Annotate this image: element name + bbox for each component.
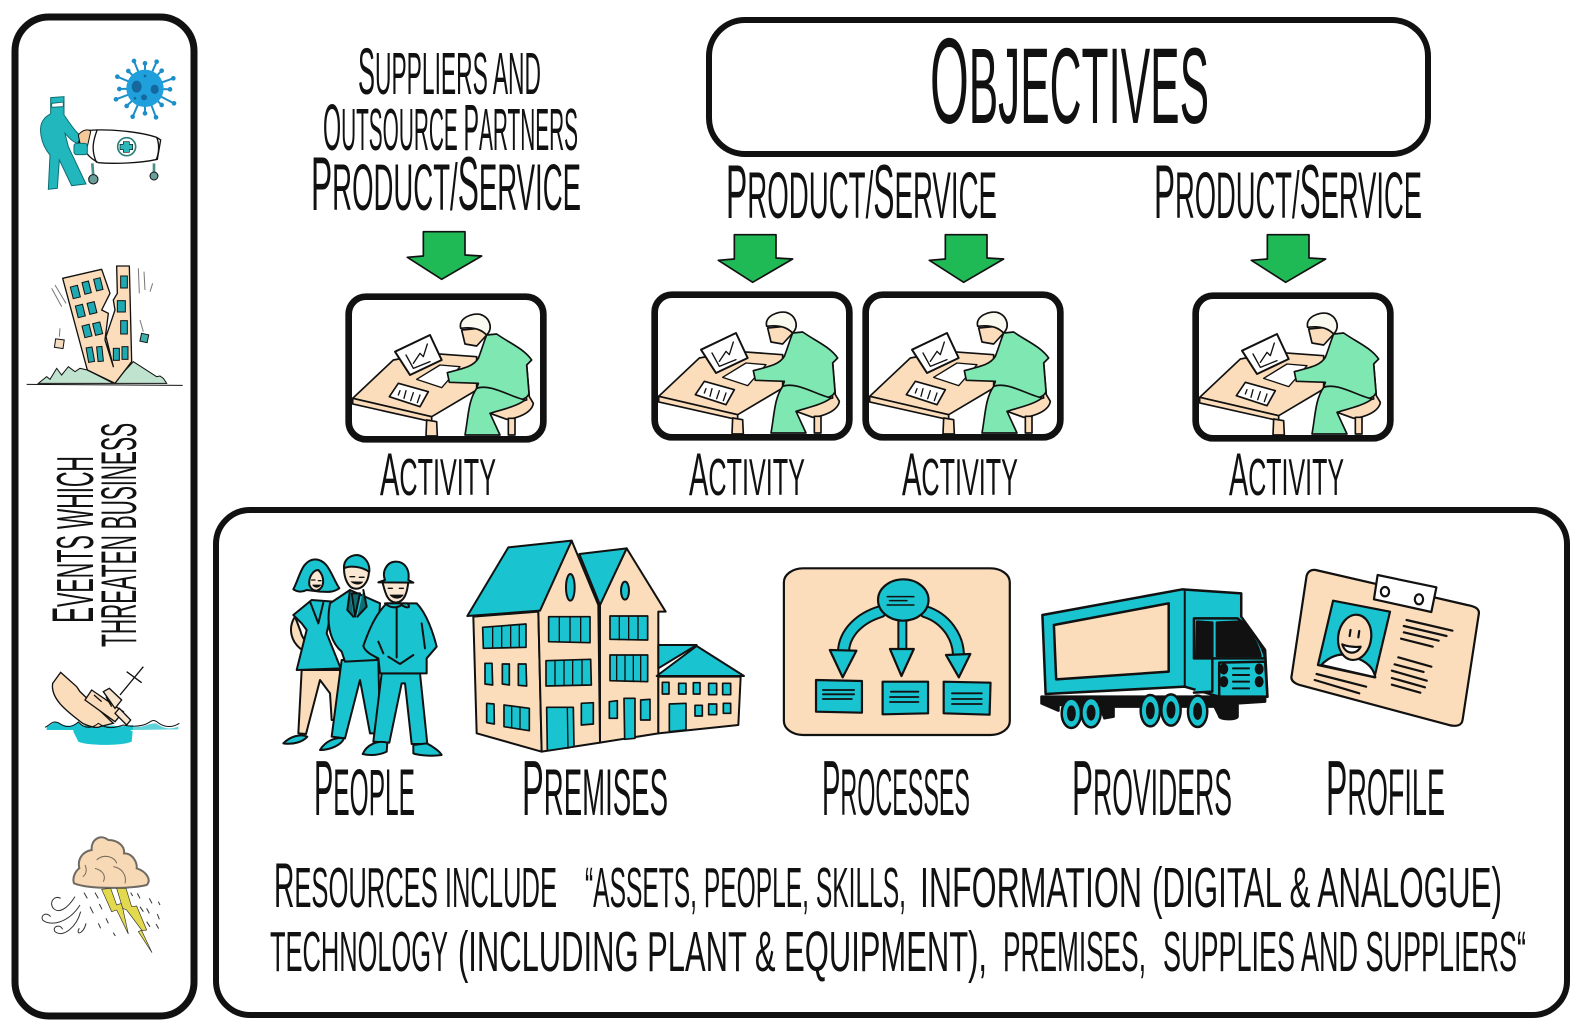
icon: premises	[467, 541, 744, 752]
panel: resources: PREMISES	[522, 744, 668, 832]
icon: virus	[115, 60, 175, 119]
text block: resources definition: TECHNOLOGY	[270, 920, 448, 984]
text block: resources definition: INFORMATION	[920, 856, 1142, 920]
heading: suppliers and outsource partners	[323, 34, 578, 164]
arrow 1	[407, 232, 482, 279]
label: product/service 1: PRODUCT/SERVICE	[311, 142, 581, 227]
icon: surgeon with stretcher	[41, 97, 161, 189]
icon: profile id card	[1291, 570, 1479, 726]
heading: events which threaten business: EVENTS WHICH	[41, 456, 106, 623]
activity illustration 3	[866, 295, 1060, 437]
label: activity 3: ACTIVITY	[902, 441, 1018, 508]
activity illustration 1	[349, 297, 543, 439]
text block: resources definition: PREMISES,	[1003, 920, 1146, 984]
activity illustration 2	[655, 295, 849, 437]
panel: resources: PROCESSES	[822, 744, 970, 832]
label: activity 2: ACTIVITY	[689, 441, 805, 508]
panel: resources: PROVIDERS	[1072, 744, 1232, 832]
text: SUPPLIERS AND	[358, 34, 541, 108]
icon: people	[283, 555, 442, 756]
icon: collapsing building	[27, 266, 183, 385]
icon: sinking ship	[45, 667, 179, 745]
label: product/service 3: PRODUCT/SERVICE	[1154, 150, 1422, 235]
arrow 4	[1251, 235, 1326, 282]
arrow 2	[718, 235, 793, 282]
icon: processes	[784, 568, 1010, 735]
activity illustration 4	[1196, 296, 1390, 438]
text block: resources definition: “ASSETS, PEOPLE, SKILLS,	[585, 856, 906, 920]
label: product/service 2: PRODUCT/SERVICE	[726, 150, 997, 235]
panel: resources	[216, 510, 1567, 1015]
heading: suppliers and outsource partners: OUTSOURCE PARTNERS	[323, 90, 578, 164]
text block: resources definition	[270, 851, 1526, 984]
panel: events which threaten business: THREATEN BUSINESS	[91, 423, 147, 647]
panel: objectives: OBJECTIVES	[930, 13, 1209, 149]
heading: events which threaten business	[41, 423, 147, 647]
panel: objectives	[709, 13, 1428, 154]
text block: resources definition: RESOURCES INCLUDE	[274, 851, 557, 921]
icon: storm cloud	[42, 837, 160, 953]
panel: resources: PROFILE	[1326, 744, 1445, 832]
label: activity 1: ACTIVITY	[380, 441, 496, 508]
arrow 3	[929, 235, 1004, 282]
icon: providers truck	[1041, 589, 1267, 728]
panel: events which threaten business	[15, 17, 194, 1016]
text block: resources definition: (INCLUDING PLANT & EQUIPMENT),	[458, 920, 987, 984]
label: activity 4: ACTIVITY	[1229, 441, 1344, 508]
panel: resources: PEOPLE	[314, 744, 415, 832]
